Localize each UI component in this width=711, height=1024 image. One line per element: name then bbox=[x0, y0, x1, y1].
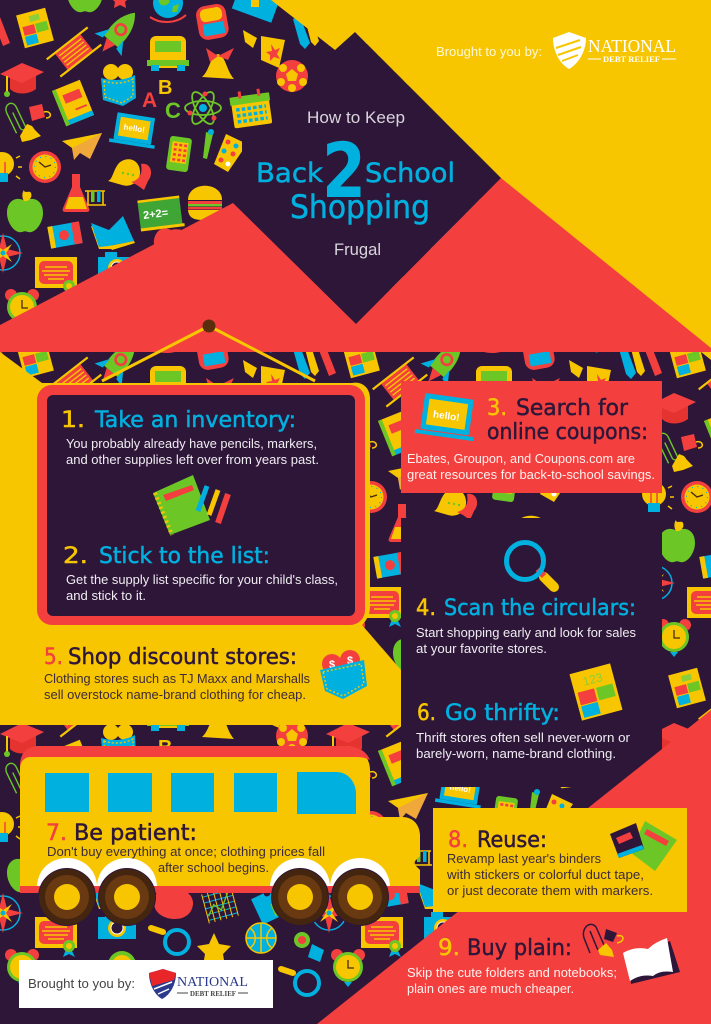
tip 2 text bbox=[66, 572, 338, 603]
panel: tip 8 reuse bbox=[433, 808, 687, 912]
tip 4 heading: 4. bbox=[416, 596, 436, 621]
icon: calculator bbox=[570, 663, 622, 721]
tip 8 text: or just decorate them with markers. bbox=[447, 883, 653, 898]
wheel arches bbox=[37, 858, 390, 926]
red header band bbox=[0, 178, 711, 352]
school bus bbox=[20, 746, 420, 926]
bus body bbox=[20, 746, 420, 886]
tip 9: buy plain: Buy plain: bbox=[467, 936, 572, 961]
icon: laptop hello: hello! bbox=[432, 409, 460, 424]
tip 2 heading: Stick to the list: bbox=[99, 544, 270, 569]
tip 7 text: Don't buy everything at once; clothing prices fall bbox=[47, 844, 325, 859]
title: How to Keep bbox=[307, 108, 405, 127]
yellow header corner bbox=[271, 0, 711, 360]
tip 3 text: Ebates, Groupon, and Coupons.com are bbox=[407, 451, 635, 466]
icon: laptop hello bbox=[415, 392, 479, 441]
panel: tip 3 online coupons bbox=[401, 381, 662, 493]
yellow section background bbox=[0, 352, 401, 725]
red corner bottom right bbox=[317, 710, 711, 1024]
tip 5: shop discount stores: Clothing stores such as TJ Maxx and Marshalls bbox=[44, 671, 310, 686]
tip 3 text bbox=[407, 451, 655, 482]
tip 6 heading: 6. bbox=[417, 701, 436, 726]
tip 8 heading: Reuse: bbox=[477, 828, 547, 853]
title: 2 bbox=[322, 126, 366, 215]
hanging wire and nail bbox=[102, 320, 315, 381]
sponsor credit top: DEBT RELIEF bbox=[603, 55, 660, 64]
tip 7 heading: Be patient: bbox=[74, 821, 197, 846]
sponsor credit bottom bbox=[19, 960, 273, 1008]
tip 3 text: great resources for back-to-school savings. bbox=[407, 467, 655, 482]
tip 3 heading bbox=[487, 396, 648, 445]
tip 2 text: Get the supply list specific for your child's class, bbox=[66, 572, 338, 587]
tip 8 text: Revamp last year's binders bbox=[447, 851, 601, 866]
sponsor credit top bbox=[436, 32, 676, 69]
icon: binder and notebook bbox=[610, 821, 677, 871]
tip 2 heading: 2. bbox=[63, 544, 88, 569]
sponsor credit top: NATIONAL bbox=[588, 36, 676, 56]
tip 7 heading: 7. bbox=[46, 821, 67, 846]
logo shield bbox=[149, 969, 176, 999]
tip 7 text bbox=[47, 844, 325, 875]
tip 6 text bbox=[416, 730, 631, 761]
tip 7 text: after school begins. bbox=[158, 860, 269, 875]
sponsor credit bottom: DEBT RELIEF bbox=[190, 990, 236, 998]
chalkboard panel bbox=[37, 385, 365, 625]
tip 5: shop discount stores: 5. bbox=[44, 645, 63, 670]
tip 9: buy plain: Skip the cute folders and notebooks; bbox=[407, 965, 617, 980]
sponsor credit bottom: Brought to you by: bbox=[28, 976, 135, 991]
tip 1 heading: Take an inventory: bbox=[94, 408, 296, 433]
icon: magnifying glass bbox=[506, 542, 554, 587]
icon: pocket with money: $ bbox=[347, 655, 353, 667]
title: Frugal bbox=[334, 240, 381, 259]
bus wheels bbox=[39, 869, 388, 925]
bus windows bbox=[45, 772, 356, 814]
title: School bbox=[365, 158, 455, 189]
icon: pocket with money: $ bbox=[329, 659, 335, 671]
tip 3 heading: Search for bbox=[516, 396, 629, 421]
tip 3 heading: online coupons: bbox=[487, 420, 648, 445]
tip 4 text bbox=[416, 625, 636, 656]
tip 9: buy plain bbox=[407, 936, 617, 996]
tip 1 text bbox=[66, 436, 319, 467]
tip 1 text: You probably already have pencils, markers, bbox=[66, 436, 317, 451]
tip 4 heading: Scan the circulars: bbox=[444, 596, 636, 621]
tip 6 text: Thrift stores often sell never-worn or bbox=[416, 730, 631, 745]
tip 5: shop discount stores: sell overstock name-brand clothing for cheap. bbox=[44, 687, 306, 702]
icon: paperclip and binder clip bbox=[583, 924, 623, 957]
tip 6 text: barely-worn, name-brand clothing. bbox=[416, 746, 616, 761]
panel: tips 4 and 6 bbox=[401, 518, 662, 787]
tip 1 text: and other supplies left over from years past. bbox=[66, 452, 319, 467]
title: Shopping bbox=[290, 188, 430, 226]
sponsor credit top: Brought to you by: bbox=[436, 44, 542, 59]
tip 5: shop discount stores bbox=[44, 645, 310, 702]
title diamond bbox=[224, 32, 501, 324]
tip 9: buy plain: 9. bbox=[438, 936, 460, 961]
tip 6 heading: Go thrifty: bbox=[445, 701, 560, 726]
tip 4 text: at your favorite stores. bbox=[416, 641, 547, 656]
title: Back bbox=[256, 158, 323, 189]
tip 9: buy plain: plain ones are much cheaper. bbox=[407, 981, 574, 996]
title bbox=[256, 108, 455, 259]
tip 8 text bbox=[446, 851, 653, 898]
icon: calculator: 123 bbox=[581, 670, 604, 689]
sponsor credit bottom: NATIONAL bbox=[177, 975, 248, 990]
icon: notebook and pencils bbox=[153, 475, 228, 535]
tip 8 text: with stickers or colorful duct tape, bbox=[446, 867, 644, 882]
tip 1 heading: 1. bbox=[61, 408, 85, 433]
icon: open book bbox=[623, 938, 680, 984]
tip 8 heading bbox=[448, 828, 547, 853]
tip 2 text: and stick to it. bbox=[66, 588, 146, 603]
icon: pocket with money bbox=[320, 650, 367, 699]
tip 3 heading: 3. bbox=[487, 396, 507, 421]
tip 4 text: Start shopping early and look for sales bbox=[416, 625, 636, 640]
tip 8 heading: 8. bbox=[448, 828, 468, 853]
tip 5: shop discount stores: Shop discount stores: bbox=[68, 645, 297, 670]
